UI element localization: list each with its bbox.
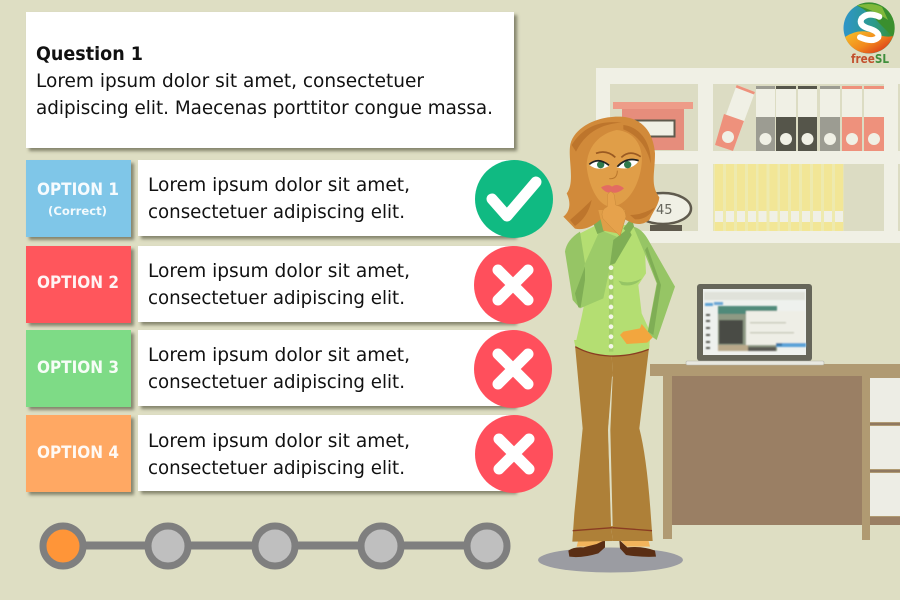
desk (650, 364, 900, 540)
neck (598, 210, 625, 234)
nose and lips (609, 171, 617, 179)
option 4 label: OPTION 4 (37, 443, 119, 463)
option 3 label: OPTION 3 (37, 358, 119, 378)
legs and shoes (568, 340, 656, 557)
icon: cross (474, 246, 552, 324)
laptop screen (704, 292, 806, 351)
icon: cross (474, 330, 552, 408)
option 1 text: Lorem ipsum dolor sit amet, (148, 174, 410, 196)
finger and hand (602, 192, 626, 236)
face (587, 130, 642, 207)
heading: question 1: Question 1 (36, 43, 143, 65)
option 2 label: OPTION 2 (37, 273, 119, 293)
option 3 row (26, 330, 552, 408)
head and hair (563, 117, 659, 236)
option 4 text: Lorem ipsum dolor sit amet, (148, 430, 410, 452)
buttons (609, 265, 613, 349)
option 1 text: consectetuer adipiscing elit. (148, 201, 405, 223)
icon: cross (475, 415, 553, 493)
option 4 row (26, 415, 553, 493)
lower hand (620, 324, 653, 344)
shirt torso (575, 225, 649, 352)
laptop (686, 284, 824, 365)
option 2 text: Lorem ipsum dolor sit amet, (148, 260, 410, 282)
icon: check mark (475, 160, 553, 238)
option 2 text (138, 246, 514, 322)
logo: freeSL: freeSL (851, 51, 889, 66)
placket and collar (610, 228, 632, 265)
option 4 text: consectetuer adipiscing elit. (148, 457, 405, 479)
option 2 label (26, 246, 131, 323)
question text: adipiscing elit. Maecenas porttitor congue massa. (36, 97, 493, 119)
shirt and arms (565, 216, 675, 352)
hair (563, 117, 659, 229)
option 4 label (26, 415, 131, 492)
option 1 row (26, 160, 553, 238)
storage box (613, 102, 693, 150)
eyes (589, 152, 641, 169)
right arm (633, 227, 675, 340)
logo: freeSL (844, 2, 895, 66)
bust line (618, 278, 642, 285)
bookshelf (596, 68, 900, 243)
option 4 text (138, 415, 514, 491)
option 2 row (26, 246, 552, 324)
binders (715, 85, 884, 151)
progress tracker (43, 526, 507, 566)
floor shadow (538, 548, 683, 572)
panel: question (26, 12, 514, 148)
yellow books (714, 164, 844, 231)
clock: 45 (656, 203, 673, 218)
character: thinking woman (538, 117, 683, 573)
option 1 label: (Correct) (48, 204, 107, 218)
question text: Lorem ipsum dolor sit amet, consectetuer (36, 70, 424, 92)
option 1 text (138, 160, 514, 236)
option 3 text: consectetuer adipiscing elit. (148, 371, 405, 393)
option 1 label: OPTION 1 (37, 180, 119, 200)
option 3 text (138, 330, 514, 406)
option 3 label (26, 330, 131, 407)
option 2 text: consectetuer adipiscing elit. (148, 287, 405, 309)
option 1 label (26, 160, 131, 237)
left arm (565, 232, 585, 308)
option 3 text: Lorem ipsum dolor sit amet, (148, 344, 410, 366)
clock (635, 193, 691, 231)
